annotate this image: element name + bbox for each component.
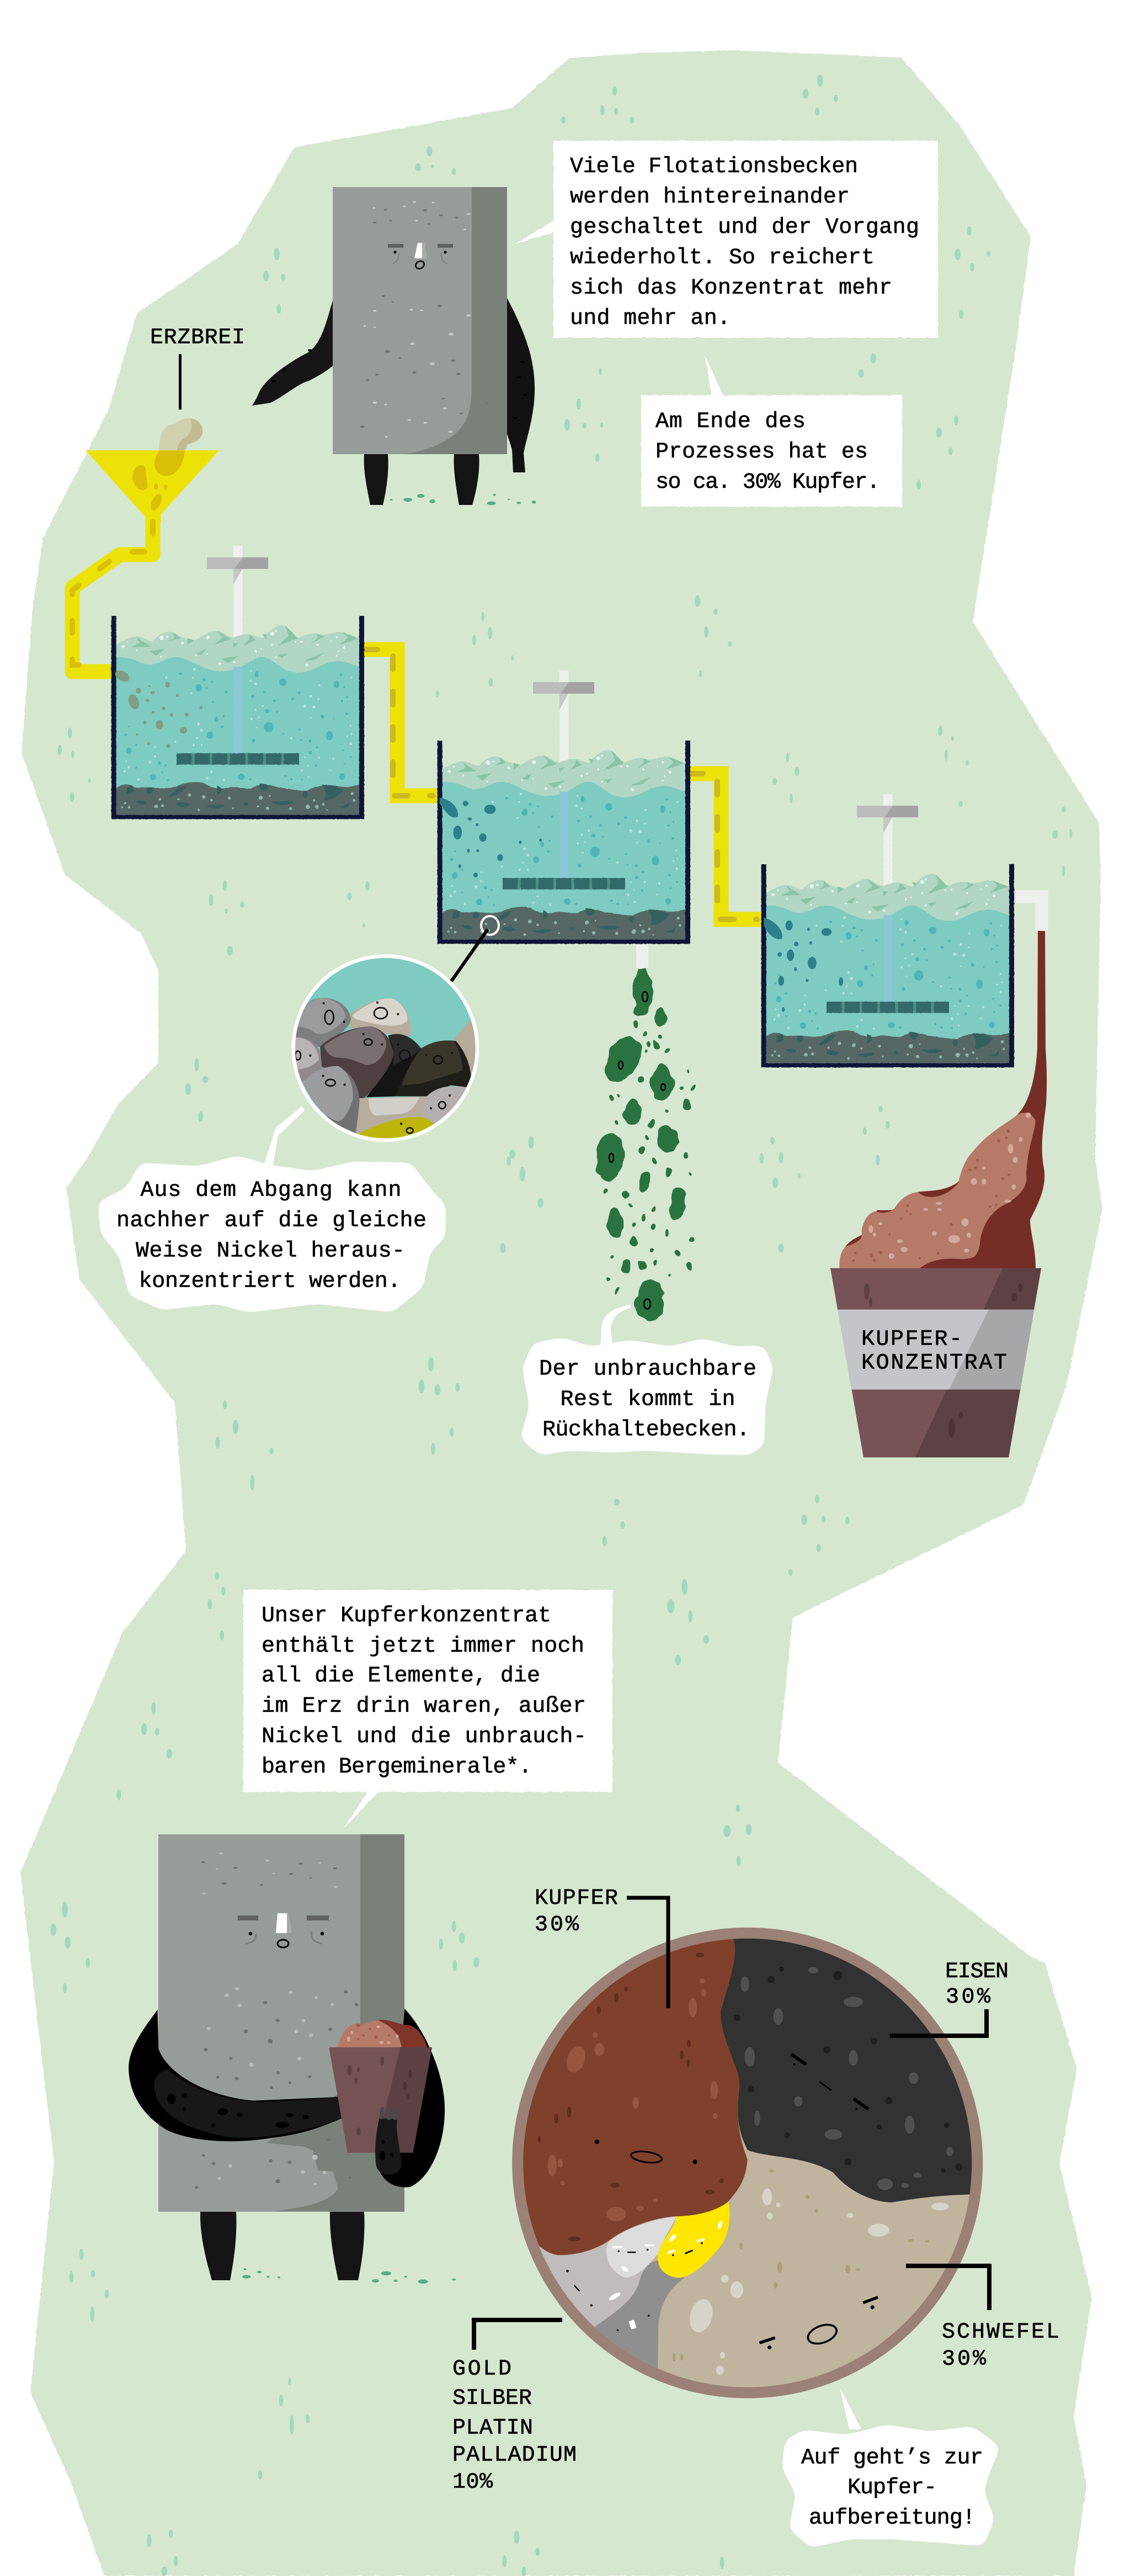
bucket label band bbox=[838, 1310, 1034, 1390]
concentrate bucket: KONZENTRAT bbox=[861, 1351, 1007, 1376]
speech bubble: Viele Flotationsbecken: werden hintereinander bbox=[570, 185, 850, 210]
speech bubble: Unser Kupferkonzentrat: all die Elemente, die bbox=[262, 1664, 540, 1689]
tank 3 stirrer bbox=[857, 794, 918, 833]
ground specks beneath character bbox=[390, 493, 536, 505]
label: Gold Silber Platin Palladium 10%: 10% bbox=[452, 2470, 493, 2495]
concentrate bucket: KUPFER- bbox=[861, 1327, 962, 1352]
pile bbox=[839, 1113, 1036, 1268]
magnified sediment circle bbox=[291, 955, 480, 1142]
sulfur: beige region bbox=[497, 1904, 1015, 2422]
body specks bbox=[201, 1853, 348, 2021]
label: Schwefel 30% bbox=[906, 2266, 1059, 2372]
speech bubble: Viele Flotationsbecken: und mehr an. bbox=[570, 306, 731, 331]
speech bubble: Am Ende des Prozesses: Am Ende des bbox=[655, 409, 806, 434]
callout: Aus dem Abgang bbox=[98, 1106, 445, 1312]
yellow rock bbox=[358, 1117, 434, 1142]
lower body shade and arms bbox=[129, 1987, 445, 2211]
ring bbox=[512, 1928, 983, 2398]
outlet pipe of tank 3 bbox=[1016, 897, 1042, 931]
funnel and ore slurry bbox=[86, 418, 219, 523]
left arm bbox=[129, 2010, 349, 2141]
rock faces bbox=[295, 1008, 446, 1133]
tank 3 bbox=[761, 795, 1014, 1067]
speech bubble: Am Ende des Prozesses: Prozesses hat es bbox=[655, 440, 868, 465]
speech bubble: Viele Flotationsbecken: sich das Konzentrat mehr bbox=[570, 276, 892, 301]
callout: Auf geht's zur Kupferaufbereitung: Kupfer- bbox=[848, 2476, 937, 2500]
black rock bbox=[366, 1034, 421, 1097]
speech bubble: Unser Kupferkonzentrat: im Erz drin waren, außer bbox=[262, 1694, 586, 1719]
label: Schwefel 30%: SCHWEFEL bbox=[942, 2320, 1059, 2345]
label: Eisen 30% bbox=[890, 1960, 1009, 2036]
callout: Aus dem Abgang: nachher auf die gleiche bbox=[116, 1209, 427, 1233]
top left grey rock bbox=[294, 998, 351, 1050]
left lilac rock bbox=[292, 1037, 322, 1083]
face bbox=[388, 243, 453, 270]
speech bubble: Viele Flotationsbecken: wiederholt. So reichert bbox=[570, 246, 875, 270]
top pale rock bbox=[350, 998, 411, 1036]
sulfur face bbox=[759, 2297, 878, 2349]
body bbox=[158, 1834, 404, 2212]
label: Gold Silber Platin Palladium 10%: PALLADIUM bbox=[452, 2443, 577, 2468]
sulfur specks bbox=[686, 2189, 949, 2375]
left arm bbox=[252, 300, 333, 406]
silver: pale grey region bbox=[529, 2216, 678, 2331]
speech bubble: Viele Flotationsbecken bbox=[515, 141, 938, 338]
label: ERZBREI bbox=[150, 326, 245, 409]
label: ERZBREI: ERZBREI bbox=[150, 326, 245, 350]
funnel bbox=[86, 450, 219, 523]
speech bubble: Unser Kupferkonzentrat: Nickel und die unbrauch- bbox=[262, 1725, 587, 1749]
silver face blob bbox=[606, 2216, 676, 2278]
gold: yellow blob bbox=[658, 2200, 729, 2278]
callout: Aus dem Abgang: Aus dem Abgang kann bbox=[140, 1178, 402, 1203]
copper: brown region bbox=[497, 1904, 748, 2255]
label: Eisen 30%: EISEN bbox=[945, 1960, 1009, 1984]
slurry lumps in funnel bbox=[132, 451, 185, 512]
pipe: tank 2 to tank 3 bbox=[687, 774, 761, 919]
character: grey rock figure, top bbox=[252, 187, 535, 505]
face bbox=[238, 1913, 329, 1947]
iron face bbox=[791, 2054, 868, 2110]
label: Kupfer 30%: 30% bbox=[535, 1913, 579, 1938]
callout: Der unbrauchbare Rest: Der unbrauchbare bbox=[539, 1357, 756, 1382]
concentrate bucket bbox=[830, 1268, 1041, 1457]
gold and silver faces bbox=[566, 2221, 723, 2331]
tank 1 ore lumps bbox=[113, 668, 202, 748]
label: Gold Silber Platin Palladium 10% bbox=[452, 2320, 577, 2495]
olive dark rock bbox=[396, 1040, 471, 1097]
tank 2 stirrer bbox=[533, 670, 594, 710]
speech bubble: Unser Kupferkonzentrat bbox=[243, 1590, 612, 1828]
label: Eisen 30%: 30% bbox=[946, 1985, 991, 2010]
label: Kupfer 30% bbox=[535, 1886, 668, 2008]
outlet pipe under tank 2 bbox=[636, 945, 648, 968]
callout: Auf geht's zur Kupferaufbereitung: Auf geht’s zur bbox=[801, 2446, 983, 2471]
brown concentrate stream and pile bbox=[839, 931, 1047, 1268]
callout: Der unbrauchbare Rest bbox=[520, 1305, 773, 1455]
legs bbox=[200, 2211, 236, 2280]
ground specks beneath second character bbox=[242, 2268, 456, 2284]
callout: Der unbrauchbare Rest: Rest kommt in bbox=[561, 1387, 735, 1412]
speech bubble: Unser Kupferkonzentrat: Unser Kupferkonzentrat bbox=[262, 1604, 551, 1628]
pipe: funnel to tank 1 bbox=[72, 510, 153, 672]
ore lump above funnel bbox=[159, 418, 202, 451]
composition pie: mineral circle bbox=[497, 1904, 1015, 2422]
pipe: tank 1 to tank 2 bbox=[361, 650, 438, 796]
callout: Auf geht's zur Kupferaufbereitung bbox=[782, 2387, 1000, 2547]
iron: dark region bbox=[721, 1904, 1015, 2202]
label: Gold Silber Platin Palladium 10%: PLATIN bbox=[452, 2416, 533, 2441]
lower beige rock bbox=[355, 1097, 436, 1142]
falling tailings: green ore lumps bbox=[595, 968, 695, 1321]
tank 3 ore lumps bbox=[764, 918, 843, 1012]
label: Gold Silber Platin Palladium 10%: SILBER bbox=[452, 2386, 532, 2411]
central brown rock bbox=[320, 1026, 393, 1098]
tank 2 bbox=[438, 671, 690, 944]
bucket content bbox=[378, 2020, 427, 2047]
callout: Aus dem Abgang: Weise Nickel heraus- bbox=[136, 1239, 405, 1264]
right arm bbox=[507, 298, 535, 472]
copper specks bbox=[548, 1978, 718, 2221]
speech bubble: Viele Flotationsbecken: Viele Flotationsbecken bbox=[570, 155, 858, 179]
body specks bbox=[271, 201, 527, 438]
speech bubble: Viele Flotationsbecken: geschaltet und der Vorgang bbox=[570, 215, 919, 240]
bucket bbox=[329, 2047, 432, 2153]
speech bubble: Unser Kupferkonzentrat: baren Bergeminerale*. bbox=[262, 1755, 532, 1780]
lower left rock bbox=[303, 1067, 360, 1133]
label: Schwefel 30%: 30% bbox=[942, 2347, 987, 2372]
iron specks bbox=[740, 1967, 953, 2190]
callout: Der unbrauchbare Rest: Rückhaltebecken. bbox=[542, 1418, 750, 1443]
legs bbox=[364, 454, 388, 505]
tank 1 bbox=[111, 546, 364, 819]
right hand bbox=[375, 2118, 402, 2175]
right arm bbox=[376, 2009, 445, 2188]
character: grey rock figure holding bucket bbox=[129, 1834, 445, 2280]
tank 2 ore lumps bbox=[440, 797, 542, 877]
copper face bbox=[595, 2139, 697, 2164]
lower right rock bbox=[423, 1086, 467, 1124]
speech bubble: Unser Kupferkonzentrat: enthält jetzt immer noch bbox=[262, 1634, 584, 1659]
platinum: mid grey region bbox=[578, 2260, 684, 2389]
stream from tank 3 bbox=[844, 931, 1047, 1268]
speech bubble: Am Ende des Prozesses bbox=[641, 354, 902, 507]
callout: Auf geht's zur Kupferaufbereitung: aufbereitung! bbox=[809, 2506, 976, 2531]
tank 1 stirrer bbox=[207, 546, 268, 585]
label: Kupfer 30%: KUPFER bbox=[535, 1886, 618, 1911]
lump faces on green ore bbox=[609, 992, 665, 1309]
speech bubble: Am Ende des Prozesses: so ca. 30% Kupfer. bbox=[655, 470, 880, 495]
detail marker on tank 2 sediment bbox=[451, 916, 499, 981]
body bbox=[333, 187, 507, 454]
label: Gold Silber Platin Palladium 10%: GOLD bbox=[452, 2357, 511, 2382]
callout: Aus dem Abgang: konzentriert werden. bbox=[139, 1269, 401, 1294]
